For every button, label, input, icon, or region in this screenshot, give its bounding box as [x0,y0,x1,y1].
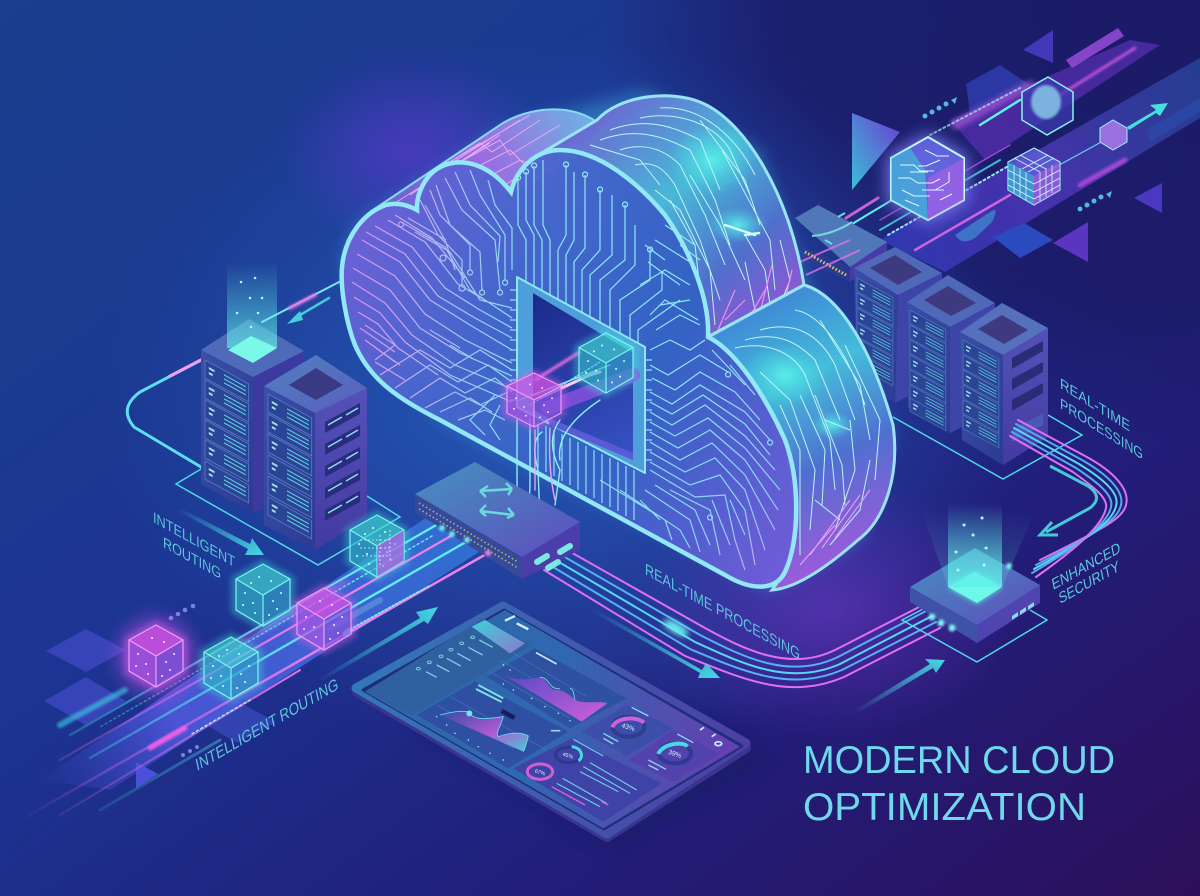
arrow: toward router [1040,466,1097,535]
label: intelligent routing upper: INTELLIGENT [153,509,235,571]
light beam on server [227,262,277,363]
icon: arrow up-right [1127,103,1168,130]
circuit traces: top [516,160,680,345]
switch port glow [439,525,491,556]
arrow: real-time path [591,608,720,678]
cloud side: right lobe [708,285,895,590]
center switch [415,462,580,579]
cloud glow [342,90,893,590]
platform outline: left servers [176,469,400,565]
circuit traces: left [352,170,517,420]
label: intelligent routing upper: ROUTING [163,534,221,583]
title: MODERN CLOUD [803,739,1115,782]
left loop connection [127,281,341,467]
cube: small pink [1100,120,1127,150]
tablet body [356,606,746,834]
cube: teal lower [199,632,263,704]
stream lines [10,520,488,826]
cloud side: left lobe [370,109,607,212]
lower-left data stream [10,510,488,826]
tablet dashboard [356,606,770,850]
cube: pink in chip [502,369,566,431]
server rack: rear [854,247,942,403]
chip [502,277,645,520]
label: real-time processing center: REAL-TIME PROCESSING [645,559,800,664]
arrow: into router [855,659,945,713]
tablet shadow [380,640,770,850]
cube: pink left [116,616,196,696]
upper-right data stream [846,28,1200,272]
panel: donut gauge two [628,730,720,782]
cloud outline [342,150,796,587]
router ports [928,563,1012,632]
stream backdrop [40,515,485,790]
cable bundle: center switch to router [544,546,940,687]
label: intelligent routing lower: INTELLIGENT ROUTING [194,674,340,775]
chip data lines [510,352,633,520]
tablet edge [357,607,746,837]
cloud [342,90,895,590]
platform outline: router [902,608,1047,662]
icon: dotted chevrons [169,604,199,757]
server rack: left tall [201,262,304,513]
circuit traces: right [600,225,780,570]
cloud side: middle lobe [530,96,804,337]
cube: teal-pink near switch [345,510,409,582]
upper switch [795,205,887,282]
arrow: intelligent routing lower [318,607,438,682]
router [902,503,1047,662]
panel: donut gauge one [582,705,673,756]
stream lines [846,48,1135,250]
title: OPTIMIZATION [803,786,1086,829]
label: enhanced security: SECURITY [1057,557,1121,608]
backdrop bands and triangles [852,28,1200,272]
cube: grid hexagon [1008,148,1060,205]
cube: pink center [292,583,356,655]
cube: outlined hexagon [1022,77,1073,135]
label: real-time processing right: REAL-TIME [1060,375,1130,435]
panel: bottom metrics [513,738,662,822]
server rack: front [960,303,1048,465]
arrow: intelligent routing upper [178,508,264,555]
server rack: middle [907,275,995,433]
label: real-time processing right: PROCESSING [1060,395,1143,464]
label: enhanced security: ENHANCED [1050,539,1122,594]
circuit traces: bottom [470,395,634,520]
panel: bottom metrics: 45% [562,752,574,761]
panel: bottom metrics: 67% [534,769,546,778]
panel: donut gauge two: 39% [667,749,682,760]
panel: sidebar [365,616,532,715]
icon: dotted chevrons [922,97,1112,212]
cube: teal in chip [574,328,638,398]
cable bundle: right servers to router [1010,420,1127,577]
toolbar icons [700,727,722,746]
cube: teal [231,559,295,631]
panel: pink area chart [487,648,627,728]
platform outline: right servers [893,415,1082,479]
label: enhanced security [1050,539,1122,608]
cloud front face [342,150,796,587]
panel: donut gauge one: 43% [621,722,635,733]
cube: large circuit hexagon [887,133,968,224]
server rack: left short [264,355,367,550]
tablet screen, drawn in 3x coordinates [365,610,740,828]
title [803,739,1115,829]
router light beam [922,503,1036,587]
panel: teal area chart [417,682,568,768]
